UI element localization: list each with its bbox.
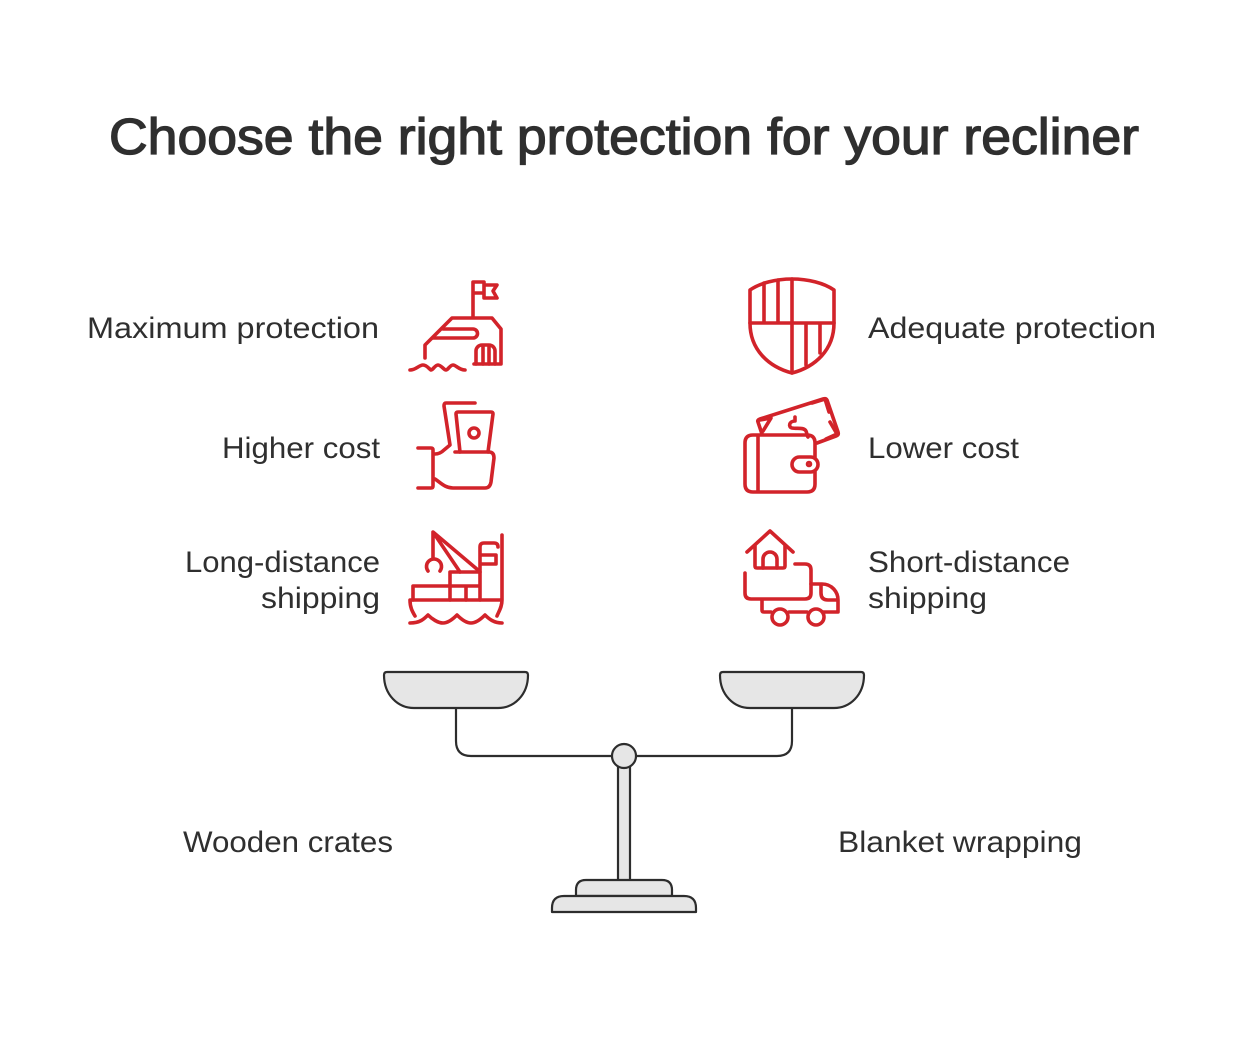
scale post bbox=[618, 766, 630, 882]
right pan bbox=[720, 672, 864, 708]
label: short-distance shipping: shipping bbox=[868, 582, 987, 615]
pivot bbox=[612, 744, 636, 768]
label: maximum protection: Maximum protection bbox=[87, 312, 379, 345]
label: long-distance shipping bbox=[185, 546, 380, 615]
icon: shield bbox=[750, 279, 834, 373]
icon: recliner fort with flag bbox=[410, 282, 501, 370]
label: lower cost: Lower cost bbox=[868, 432, 1020, 465]
balance scale bbox=[384, 672, 864, 912]
icon: delivery truck with house bbox=[745, 531, 838, 625]
label: long-distance shipping: shipping bbox=[261, 582, 380, 615]
icon: hand holding money bbox=[418, 403, 494, 488]
left pan bbox=[384, 672, 528, 708]
label: adequate protection: Adequate protection bbox=[868, 312, 1156, 345]
label: long-distance shipping: Long-distance bbox=[185, 546, 380, 579]
label: blanket wrapping: Blanket wrapping bbox=[838, 826, 1082, 859]
label: short-distance shipping: Short-distance bbox=[868, 546, 1070, 579]
icon: wallet with banknote bbox=[745, 399, 838, 492]
label: short-distance shipping bbox=[868, 546, 1070, 615]
upper base bbox=[576, 880, 672, 896]
title: Choose the right protection for your recliner bbox=[109, 108, 1139, 165]
scale beam bbox=[456, 708, 792, 756]
lower base bbox=[552, 896, 696, 912]
label: higher cost: Higher cost bbox=[222, 432, 381, 465]
label: wooden crates: Wooden crates bbox=[183, 826, 393, 859]
icon: cargo ship with crane bbox=[410, 532, 502, 623]
